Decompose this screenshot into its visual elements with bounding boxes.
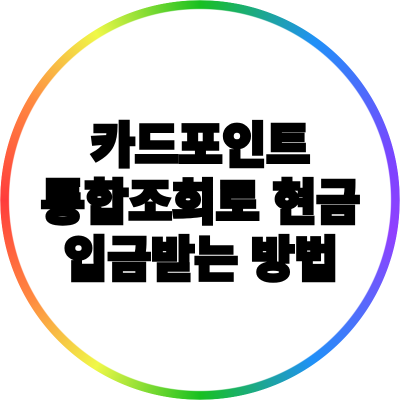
title line 3: 입금받는 방법 [64, 234, 338, 287]
title line 2: 통합조회로 현금 [41, 177, 360, 230]
title line 1: 카드포인트 [91, 120, 310, 173]
